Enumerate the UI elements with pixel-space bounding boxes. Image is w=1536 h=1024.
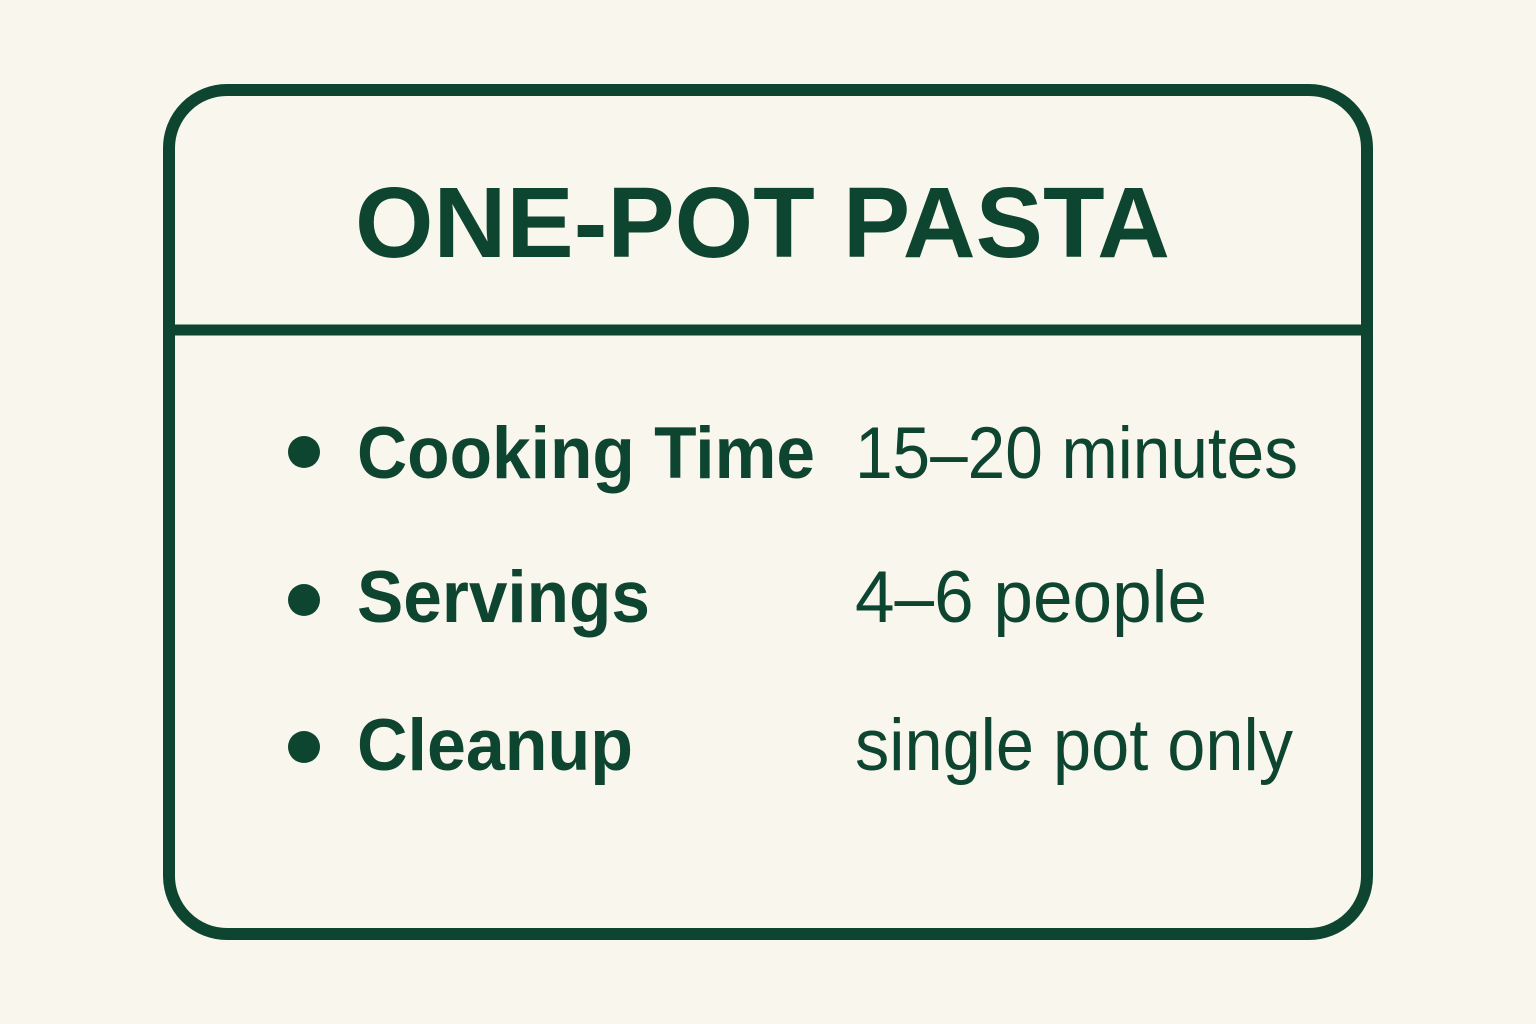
title: ONE-POT PASTA <box>355 167 1170 279</box>
label: cleanup: Cleanup <box>357 705 633 786</box>
row: servings <box>288 557 1207 638</box>
label: cooking time: Cooking Time <box>357 413 815 494</box>
row: cleanup <box>288 705 1293 786</box>
value: cooking time: 15–20 minutes <box>855 413 1298 494</box>
icon: bullet <box>288 584 320 616</box>
row: cooking time <box>288 413 1298 494</box>
label: servings: Servings <box>357 557 650 638</box>
icon: bullet <box>288 731 320 763</box>
value: servings: 4–6 people <box>855 557 1207 638</box>
icon: bullet <box>288 436 320 468</box>
value: cleanup: single pot only <box>855 705 1293 786</box>
card panel <box>169 90 1367 934</box>
